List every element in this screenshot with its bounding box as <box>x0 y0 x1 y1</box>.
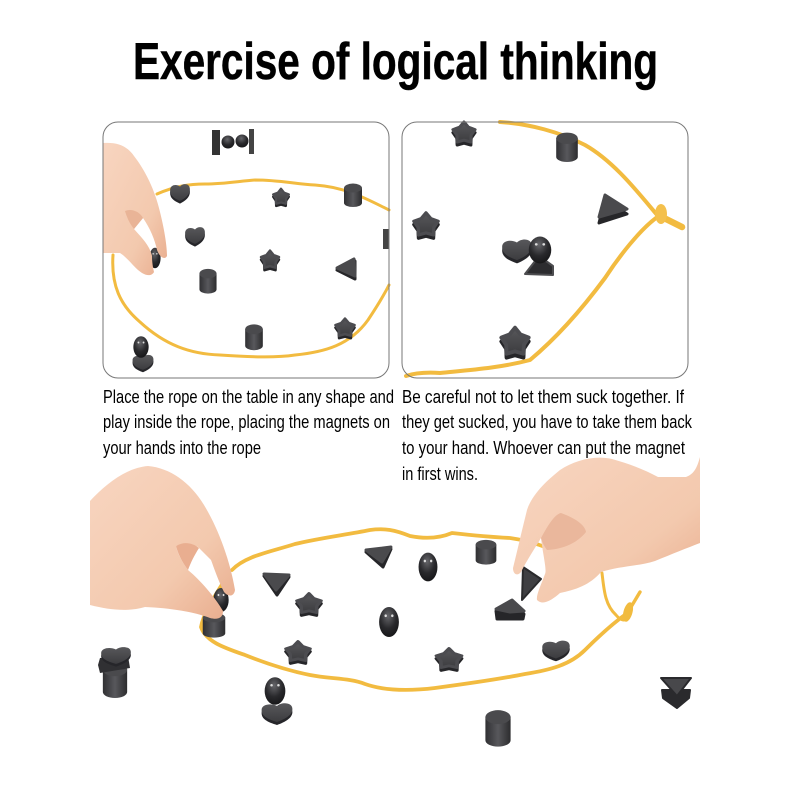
text block: right caption <box>402 387 693 484</box>
text block: left caption <box>103 387 394 458</box>
held triangle magnet <box>522 567 541 600</box>
panel border <box>402 122 688 378</box>
bottom photo: two players <box>90 457 700 747</box>
panel border <box>103 122 389 378</box>
text block: left caption: play inside the rope, placing the magnets on <box>103 412 390 432</box>
star magnet <box>414 213 438 238</box>
held cylinder and ball <box>203 588 229 638</box>
left hand fold <box>176 543 199 570</box>
magnet stack far left <box>98 647 131 698</box>
left hand <box>90 466 235 619</box>
text block: right caption: Be careful not to let them suck together. If <box>402 387 685 407</box>
magnet stack bottom left <box>133 336 153 372</box>
right hand fold <box>541 513 586 550</box>
text block: left caption: Place the rope on the table in any shape and <box>103 387 394 407</box>
hand <box>103 143 167 275</box>
magnets top cluster <box>212 129 254 155</box>
magnet in hand <box>149 248 161 268</box>
star magnet <box>501 328 529 358</box>
title: Exercise of logical thinking <box>133 33 658 91</box>
stacked magnets <box>502 237 553 275</box>
text block: right caption: to your hand. Whoever can put the magnet <box>402 438 685 458</box>
triangle magnet <box>599 195 627 223</box>
cylinder front <box>485 710 511 747</box>
cylinder magnet <box>556 133 578 162</box>
hand finger fold <box>125 210 143 229</box>
panel: place the rope photo <box>103 122 389 378</box>
right hand <box>513 457 700 602</box>
triangle stack far right <box>661 678 691 708</box>
text block: right caption: in first wins. <box>402 464 478 484</box>
magnets inside the rope <box>264 540 570 670</box>
rope with knot <box>406 122 682 376</box>
magnets on table <box>170 184 389 350</box>
panel: careful magnets photo <box>402 122 688 378</box>
star magnet <box>453 122 475 145</box>
magnet stack front <box>262 677 292 725</box>
text block: right caption: they get sucked, you have to take them back <box>402 412 693 432</box>
rope loop <box>201 529 640 690</box>
text block: left caption: your hands into the rope <box>103 438 261 458</box>
rope loop <box>113 180 389 357</box>
